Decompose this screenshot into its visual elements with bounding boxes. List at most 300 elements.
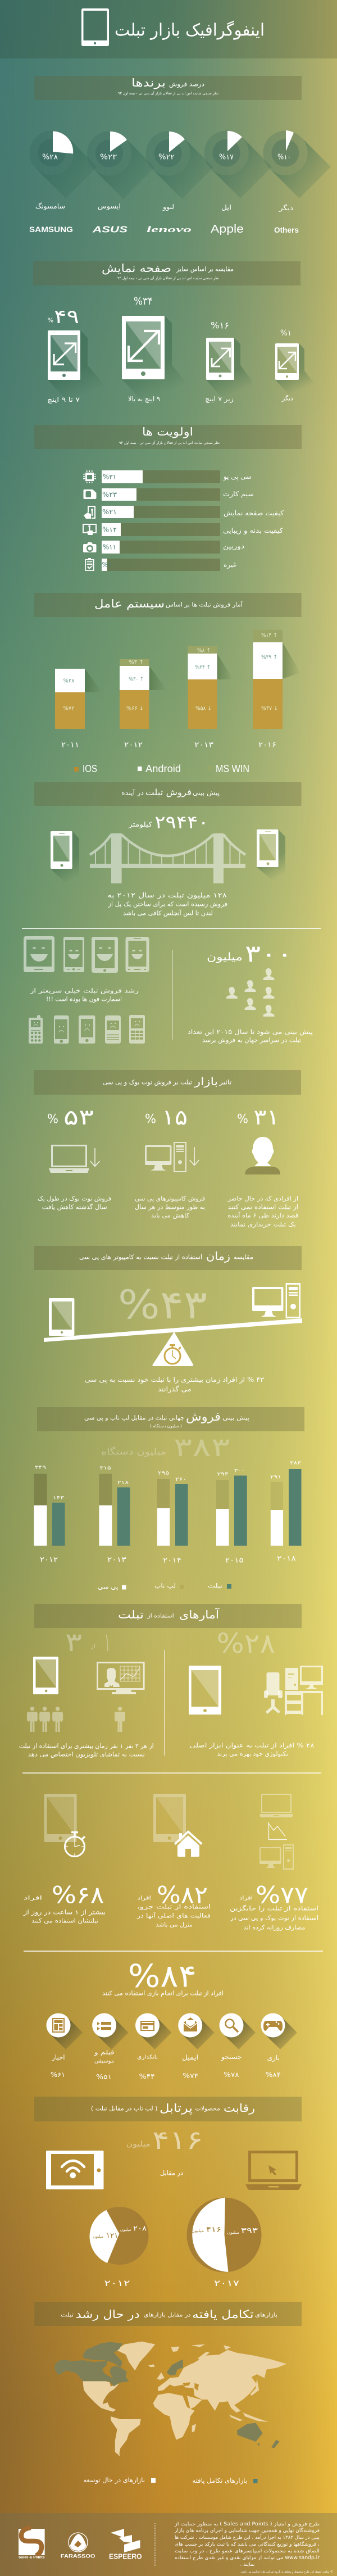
pie chart: samsung 28%: [29, 130, 97, 198]
icon: phone with stopwatch: [44, 1794, 77, 1842]
device: above 9 inch 34%: %۳۴: [134, 295, 153, 307]
icon: office desk: [264, 1666, 323, 1715]
pie chart: 2017: ۴۱۶: [206, 2225, 221, 2234]
stat: 416 million: میلیون: [126, 2140, 151, 2149]
heading: brands: نظر سنجی سایت اس اند پی از فعالان بازار آی سی تی - نیمه اول ۹۳: [118, 90, 218, 96]
icons: people 3 and 1: [27, 1707, 125, 1732]
heading: screen size: نظر سنجی سایت اس اند پی از فعالان بازار آی سی تی - نیمه اول ۹۳: [117, 275, 219, 280]
footer band: [0, 2513, 337, 2576]
heading: screen size: مقایسه بر اساس سایز: [176, 265, 234, 273]
logo: espeero: ESPEERO: [109, 2552, 142, 2560]
legend: markets: [83, 2476, 257, 2485]
label: versus: در مقابل: [160, 2169, 183, 2177]
column: 82 percent: استفاده از تبلت جزو،: [137, 1903, 211, 1911]
heading: portable rivalry: پرتابل: [160, 2101, 193, 2115]
stat: 416 million: ۴۱۶: [152, 2125, 203, 2155]
bar row: screen quality: %۲۱: [102, 508, 117, 516]
grouped bars: 2015: ۲۹۳: [217, 1472, 229, 1477]
pie chart: others 10%: [263, 130, 331, 198]
grouped bars: 2014: ۲۶۰: [175, 1477, 186, 1482]
heading: sales forecast devices: ( میلیون دستگاه ): [150, 1423, 182, 1428]
text: about sales and points: www.sandp.ir می توانند از مزایای نقدی و غیر نقدی طرح استفاده: [175, 2555, 320, 2561]
heading: tablet usage stats: [34, 1604, 302, 1628]
column: 77 percent: استفاده از تبلت را جایگزین: [230, 1905, 318, 1912]
activity: film and music 51%: [92, 2013, 129, 2081]
legend: operating systems: MS WIN: [216, 763, 249, 774]
column: 68 percent: بیشتر از ۱ ساعت در روز از: [23, 1908, 106, 1916]
grouped bars: 2018: ۲۹۱: [270, 1475, 281, 1480]
text: tv caption: [19, 1742, 154, 1758]
icon: phone with house: [153, 1794, 186, 1842]
text: 2015 forecast: [188, 1028, 313, 1044]
grouped bars: 2013: [99, 1466, 130, 1564]
stacked bar: 2011: [55, 669, 102, 750]
stacked bar: 2013: [188, 646, 233, 750]
bar row: other: غیره: [224, 561, 236, 569]
activity: email 74%: %۷۴: [183, 2072, 198, 2080]
bar row: screen quality: [84, 506, 284, 519]
column: pc: کاهش می یابد: [151, 1212, 190, 1219]
column: notebook: ۵۳: [63, 1105, 94, 1130]
brand logos: [29, 223, 299, 235]
brand names: سامسونگ: [35, 202, 65, 211]
pie chart: lenovo 22%: [146, 131, 213, 199]
bar row: sim card: %۲۳: [102, 491, 117, 498]
legend: markets: بازارهای در حال توسعه: [83, 2476, 145, 2484]
heading: portable rivalry: محصولات: [195, 2106, 220, 2112]
legend: operating systems: Android: [145, 763, 181, 774]
device: other 1%: دیگر: [281, 394, 293, 402]
stat: 84 percent: افراد از تبلت برای انجام بازی استفاده می کنند: [102, 1989, 224, 1997]
text: about sales and points: طرح فروش و امتیاز ( Sales and Points ) به منظور حمایت از: [174, 2521, 320, 2527]
pie chart: 2012: میلیون: [120, 2228, 131, 2232]
heading: mature vs growing markets: تبلت: [61, 2312, 74, 2319]
bar row: body quality: کیفیت بدنه و زیبایی: [223, 527, 283, 535]
text: time caption: می گذرانند: [158, 1385, 192, 1394]
activity: search 78%: %۷۸: [224, 2071, 239, 2079]
activity: news 61%: اخبار: [51, 2053, 65, 2062]
column: notebook: [38, 1105, 111, 1210]
icon: laptop with cursor: [245, 2151, 302, 2190]
grouped bars: 2012: ۲۰۱۲: [40, 1555, 58, 1564]
stacked bar: 2013: %۵۸ ↓: [195, 706, 212, 711]
logo: espeero: [109, 2529, 142, 2560]
column: pc: فروش کامپیوترهای پی سی: [135, 1195, 205, 1203]
heading: mature vs growing markets: [34, 2302, 302, 2326]
icon: tablet on scale: [49, 1298, 74, 1336]
pie chart: 2012: میلیون: [93, 2234, 103, 2239]
bar row: other: %۲: [102, 561, 111, 569]
heading: brands: درصد فروش: [169, 81, 204, 88]
device: above 9 inch 34%: [122, 295, 188, 403]
column: 82 percent: منزل می باشد: [156, 1921, 193, 1929]
text: time caption: [85, 1376, 265, 1394]
text: bridge caption: [107, 891, 227, 917]
text: tv caption: از هر ۳ نفر ۱ نفر زمان بیشتری برای استفاده از تبلت: [19, 1742, 154, 1750]
heading: usage time: استفاده از تبلت نسبت به کامپیوتر های پی سی: [79, 1253, 202, 1261]
stat: 1 of 3: از: [90, 1643, 95, 1650]
text: copyright: © تمامی حقوق این طرح محفوظ و متعلق به گروه شرکت های فراسو می باشد.: [240, 2570, 333, 2574]
heading: portable rivalry: رقابت: [224, 2101, 255, 2115]
icons: sad phones: [29, 1015, 145, 1044]
column: notebook: فروش نوت بوک در طول یک: [38, 1195, 111, 1203]
heading: sales forecast: در آینده: [121, 789, 144, 797]
pie chart: apple 17%: [204, 130, 272, 198]
pie chart: 2017: میلیون: [227, 2230, 239, 2235]
activity: film and music 51%: موسیقی: [94, 2058, 114, 2065]
activity: games 84%: بازی: [267, 2054, 280, 2062]
heading: mature vs growing markets: در مقابل بازارهای: [144, 2312, 191, 2319]
text: bridge caption: ۱۲۸ میلیون تبلت در سال ۲۰۱۲ به: [107, 891, 227, 900]
column: buying intent: [227, 1105, 298, 1228]
grouped bars: 2018: ۲۰۱۸: [277, 1554, 296, 1563]
column: 68 percent: %۶۸: [52, 1881, 104, 1908]
activity: film and music 51%: %۵۱: [96, 2073, 112, 2081]
icons: people: [226, 968, 274, 1017]
stacked bar: 2012: [120, 659, 167, 750]
icon: clipboard: [85, 558, 94, 571]
bar row: screen quality: کیفیت صفحه نمایش: [224, 509, 284, 518]
legend: operating systems: [74, 763, 249, 774]
heading: sales forecast: فروش تبلت: [145, 787, 192, 797]
column: 77 percent: مصارف روزانه کرده اند: [244, 1924, 306, 1931]
bar row: camera: دوربین: [223, 542, 244, 551]
icon: chip: [83, 470, 96, 483]
grouped bars: 2018: ۳۸۳: [290, 1461, 301, 1466]
column: 82 percent: فعالیت های اصلی آنها در: [136, 1912, 211, 1920]
heading: tablet usage stats: استفاده از: [147, 1613, 174, 1620]
heading: screen size: صفحه نمایش: [102, 261, 171, 275]
column: 82 percent: %۸۲: [157, 1881, 208, 1908]
stacked bar: 2012: %۳۰ ↑: [129, 677, 144, 682]
pie chart: 2012: ۲۰۱۲: [104, 2278, 130, 2288]
stat: 383 million devices: ۳۸۳: [174, 1432, 230, 1462]
column: buying intent: یک تبلت خریداری نمایند: [230, 1221, 296, 1228]
text: main tech device caption: ۲۸ % افراد از تبلت به عنوان ابزار اصلی: [190, 1742, 315, 1749]
stacked bar: 2016: [253, 630, 300, 750]
text: 2015 forecast: تبلت در سراسر جهان به فروش برسد: [202, 1036, 301, 1044]
pie chart: lenovo 22%: %۲۲: [158, 153, 175, 162]
brand names: اپل: [221, 203, 231, 211]
stacked bar: 2011: %۲۸: [63, 678, 75, 684]
grouped bars: 2015: [216, 1468, 247, 1564]
legend: markets: بازارهای تکامل یافته: [192, 2477, 247, 2485]
column: 82 percent: افراد: [138, 1895, 151, 1902]
grouped bars: 2015: ۲۰۱۵: [225, 1557, 244, 1564]
bar row: cpu: [83, 470, 252, 483]
column: notebook: %: [47, 1113, 58, 1126]
stat: 300 million: میلیون: [207, 951, 243, 963]
brand logos: Others: [274, 225, 299, 234]
bar row: body quality: %۱۲: [102, 526, 117, 534]
grouped bars: 2012: [34, 1465, 65, 1564]
pie chart: others 10%: %۱۰: [277, 153, 291, 162]
device: under 7 inch 16%: زیر ۷ اینچ: [205, 395, 234, 403]
heading: mature vs growing markets: بازارهای: [255, 2312, 277, 2319]
logo: sales and points: Sales & Points: [19, 2556, 45, 2559]
icon: clock: [165, 1345, 181, 1364]
heading: mature vs growing markets: تکامل یافته: [192, 2307, 254, 2321]
column: 77 percent: استفاده از نوت بوک و پی سی در: [230, 1914, 318, 1922]
stacked bar: 2012: %۴ ↑: [129, 660, 144, 665]
grouped bars: 2012: ۳۴۹: [35, 1465, 46, 1471]
activity: news 61%: [46, 2013, 83, 2079]
activity: email 74%: ایمیل: [182, 2053, 198, 2061]
stacked bar: 2016: %۳۹ ↑: [261, 654, 277, 661]
text: about sales and points: بینی در سال ۱۳۸۳ به اجرا درآمد . این طرح شامل موسسات ، شرکت ها: [175, 2534, 320, 2541]
text: about sales and points: نمایند .: [240, 2562, 255, 2568]
column: pc: [135, 1105, 205, 1219]
header band: [0, 0, 337, 58]
column: buying intent: از افرادی که در حال حاضر: [227, 1195, 298, 1203]
text: tv caption: نسبت به تماشای تلویزیون اختصاص می دهد: [28, 1751, 145, 1758]
legend: operating systems: IOS: [83, 763, 97, 774]
stat: 29440 km: کیلومتر: [128, 820, 152, 829]
legend: devices: تبلت: [208, 1582, 222, 1589]
text: about sales and points: فروشندگان نهایی و همچنین جهت شناسایی و اجرای برنامه های بازار: [174, 2528, 320, 2533]
legend: devices: پی سی: [98, 1584, 118, 1590]
grouped bars: 2014: ۲۹۵: [158, 1471, 169, 1476]
brand logos: ASUS: [92, 225, 127, 235]
heading: sales forecast: پیش بینی: [193, 789, 220, 797]
column: buying intent: %: [237, 1113, 248, 1126]
stat: 1 of 3: ۳: [65, 1627, 82, 1657]
text: about sales and points: [174, 2521, 320, 2568]
column: 68 percent: [23, 1794, 106, 1924]
heading: market impact: تاثیر: [219, 1079, 231, 1086]
column: buying intent: ۳۱: [254, 1105, 280, 1130]
device: 7 to 9 inch 49%: ۴۹: [54, 306, 79, 328]
stat: 28 percent: %۲۸: [217, 1628, 275, 1659]
grouped bars: 2018: [270, 1461, 301, 1563]
heading: market impact: تبلت بر فروش نوت بوک و پی سی: [103, 1079, 192, 1086]
text: bridge caption: فروش رسیده است که برای ساختن یک پل از: [107, 900, 227, 908]
legend: devices: [98, 1582, 231, 1590]
logo: farassoo: [61, 2533, 95, 2559]
stat: 300 million: ۳۰۰: [245, 940, 293, 968]
pie chart: samsung 28%: %۲۸: [42, 153, 58, 162]
heading: operating system: آمار فروش تبلت ها بر اساس: [166, 600, 243, 608]
pie chart: 2012: ۱۲۱: [106, 2232, 118, 2240]
brand logos: SAMSUNG: [29, 225, 73, 234]
activity: search 78%: [219, 2013, 256, 2079]
activity: banking 44%: [135, 2013, 172, 2080]
stat: 416 million: [126, 2125, 203, 2155]
activity: games 84%: [261, 2013, 297, 2079]
text: main tech device caption: تکنولوژی خود بهره می برند: [217, 1750, 288, 1758]
device: under 7 inch 16%: %۱۶: [211, 320, 229, 330]
bar row: camera: [83, 541, 244, 554]
icon: tablet large: [189, 1666, 221, 1715]
brand logos: Apple: [211, 223, 244, 235]
column: pc: %: [145, 1113, 156, 1126]
world map: [55, 2342, 286, 2457]
seesaw scale: [44, 1283, 302, 1366]
pie chart: 2017: ۲۰۱۷: [214, 2278, 239, 2288]
grouped bars: 2014: [157, 1471, 188, 1564]
icon: touch screen: [84, 506, 95, 519]
icon: pc and down arrow: [145, 1142, 186, 1172]
stat: 383 million devices: [101, 1432, 230, 1462]
icon: laptop, chart and pc: [259, 1794, 293, 1817]
text: tablets grow faster: رشد فروش تبلت خیلی سریعتر از: [29, 987, 139, 995]
pie chart: 2017: ۳۹۳: [241, 2226, 258, 2235]
legend: devices: لپ تاپ: [154, 1582, 176, 1589]
pie chart: asus 23%: [87, 131, 155, 199]
text: tablets grow faster: اسمارت فون ها بوده است !!!: [46, 996, 122, 1003]
heading: portable rivalry: [34, 2097, 302, 2121]
bar row: sim card: سیم کارت: [223, 490, 254, 498]
activity: news 61%: %۶۱: [51, 2071, 65, 2079]
device: 7 to 9 inch 49%: ۷ تا ۹ اینچ: [47, 396, 80, 403]
title: اینفوگرافیک بازار تبلت: [115, 20, 265, 40]
icon: tablet: [81, 8, 109, 46]
stacked bar: 2013: %۳۴ ↑: [195, 664, 211, 671]
heading: mature vs growing markets: در حال رشد: [76, 2307, 140, 2321]
column: pc: ۱۵: [162, 1105, 188, 1130]
icon: tablet touch: [83, 524, 97, 535]
icons: happy tablets: [24, 936, 149, 973]
bar row: body quality: [83, 523, 283, 536]
heading: sales forecast devices: فروش: [186, 1410, 221, 1423]
activity: search 78%: جستجو: [221, 2053, 242, 2061]
text: 2015 forecast: پیش بینی می شود تا سال ۲۰۱۵ این تعداد: [188, 1028, 313, 1036]
activity: games 84%: %۸۴: [266, 2071, 281, 2079]
brand names: لنوو: [162, 203, 174, 211]
logo: farassoo: FARASSOO: [61, 2554, 95, 2559]
grouped bars: 2014: ۲۰۱۴: [163, 1557, 181, 1564]
stat: 29440 km: [128, 811, 209, 833]
heading: operating system: سیستم عامل: [94, 597, 165, 610]
device: above 9 inch 34%: ۹ اینچ به بالا: [128, 395, 160, 403]
pie chart: 2017: [186, 2197, 262, 2288]
pie chart: asus 23%: %۲۳: [100, 153, 117, 162]
grouped bars: 2013: ۳۱۵: [100, 1466, 111, 1471]
grouped bars: 2012: ۱۴۳: [53, 1495, 64, 1501]
activity: film and music 51%: فیلم و: [94, 2050, 115, 2056]
column: 82 percent: [136, 1794, 211, 1929]
pie chart: 2012: ۲۰۸: [133, 2224, 147, 2233]
heading: sales forecast devices: پیش بینی: [222, 1414, 249, 1422]
brand names: [35, 202, 293, 212]
stat: 1 of 3: [65, 1627, 110, 1657]
bar row: other: [85, 558, 236, 571]
column: 77 percent: [230, 1794, 318, 1931]
stacked bar: 2011: %۷۲: [63, 706, 74, 711]
stat: 43 percent: %۴۳: [118, 1282, 207, 1328]
heading: sales forecast: [34, 782, 301, 806]
text: about sales and points: ، فروشگاهها و توزیع کنندگانی می باشد که با ثبت بارکد بر چسب های: [175, 2541, 320, 2547]
heading: sales forecast devices: جهانی تبلت در مقابل لپ تاپ و پی سی: [84, 1414, 184, 1422]
heading: screen size: [33, 261, 300, 285]
heading: operating system: [34, 593, 301, 617]
heading: portable rivalry: ( لپ تاپ در مقابل تبلت ): [91, 2105, 157, 2112]
grouped bars: 2013: ۲۱۸: [117, 1480, 129, 1486]
heading: brands: [34, 76, 302, 100]
device: other 1%: [275, 329, 313, 402]
pie chart: 2017: میلیون: [192, 2229, 204, 2233]
bar row: cpu: سی پی یو: [223, 473, 252, 481]
heading: priorities: اولویت ها: [142, 425, 193, 438]
icon: laptop and down arrow: [49, 1145, 89, 1173]
heading: sales forecast devices: [37, 1407, 304, 1431]
heading: tablet usage stats: آمارهای: [179, 1607, 220, 1621]
grouped bars: 2015: ۳۰۰: [234, 1468, 245, 1474]
column: buying intent: از تبلت استفاده نمی کنند: [228, 1204, 298, 1210]
stacked bar: 2012: %۶۶ ↓: [126, 706, 144, 711]
icon: person: [252, 1137, 274, 1166]
icon: sim: [83, 489, 97, 499]
text: bridge caption: لندن تا لس آنجلس کافی می باشد: [123, 909, 213, 917]
heading: usage time: [34, 1246, 302, 1270]
brand names: ایسوس: [98, 202, 121, 211]
stacked bar: 2016: ۲۰۱۶: [258, 741, 276, 750]
heading: priorities: نظر سنجی سایت اس اند پی از فعالان بازار آی سی تی - نیمه اول ۹۳: [119, 440, 220, 445]
stacked bar: 2016: %۱۴ ↑: [261, 633, 277, 638]
stacked bar: 2016: %۴۷ ↓: [261, 706, 278, 711]
stat: 84 percent: [102, 1958, 224, 1997]
heading: market impact: بازار: [194, 1076, 218, 1088]
heading: market impact: [34, 1070, 301, 1095]
column: pc: به طور متوسط در هر سال: [135, 1204, 205, 1210]
icon: pc on scale: [252, 1283, 300, 1318]
text: time caption: ۴۳ % از افراد زمان بیشتری را با تبلت خود نسبت به پی سی: [85, 1376, 265, 1384]
infographic canvas: ۱: [104, 1627, 110, 1657]
icon: tablet: [33, 1657, 58, 1694]
activity: banking 44%: %۴۴: [139, 2072, 155, 2080]
brand names: دیگر: [279, 204, 293, 212]
stat: 84 percent: %۸۴: [128, 1958, 197, 1995]
logo: sales and points: [19, 2528, 45, 2559]
icon: tv with presenter: [97, 1662, 145, 1694]
device: other 1%: %۱: [280, 329, 292, 338]
column: 68 percent: افراد: [24, 1895, 42, 1902]
device: 7 to 9 inch 49%: [47, 306, 104, 403]
stat: 300 million: [207, 940, 293, 968]
column: buying intent: قصد دارند طی ۶ ماه آینده: [227, 1212, 298, 1219]
stacked bar: 2012: ۲۰۱۲: [124, 741, 143, 750]
heading: priorities: [34, 425, 302, 449]
heading: usage time: زمان: [206, 1249, 230, 1263]
heading: tablet usage stats: تبلت: [118, 1608, 144, 1621]
icon: tablet with wifi: [46, 2151, 103, 2189]
stat: 29440 km: ۲۹۴۴۰: [154, 811, 209, 833]
text: main tech device caption: [190, 1742, 315, 1758]
icon: camera: [83, 542, 97, 552]
column: 77 percent: افراد: [239, 1895, 253, 1902]
column: 77 percent: %۷۷: [256, 1881, 308, 1908]
icon: right phone: [257, 829, 285, 885]
device: 7 to 9 inch 49%: %: [48, 317, 53, 324]
icon: bridge: [90, 833, 245, 883]
icon: left phone: [51, 831, 79, 888]
bar row: sim card: [83, 488, 254, 501]
brand logos: lenovo: [147, 225, 192, 234]
column: notebook: سال گذشته کاهش یافت: [42, 1204, 107, 1210]
pie chart: apple 17%: %۱۷: [219, 153, 234, 162]
device: under 7 inch 16%: [205, 320, 253, 403]
bar row: camera: %۱۱: [103, 543, 116, 551]
stacked bar: 2013: %۸ ↑: [197, 647, 211, 654]
stacked bar: 2013: ۲۰۱۳: [194, 741, 213, 750]
text: about sales and points: الصاق شده به محصولات اسپانسرهای عضو طرح ، در وب سایت: [175, 2548, 320, 2554]
activity: banking 44%: بانکداری: [137, 2055, 158, 2060]
bar row: cpu: %۳۱: [103, 473, 116, 481]
text: tablets grow faster: [29, 987, 139, 1003]
pie chart: 2012: [90, 2207, 148, 2288]
heading: usage time: مقایسه: [234, 1253, 253, 1261]
stat: 383 million devices: میلیون دستگاه: [101, 1446, 166, 1458]
